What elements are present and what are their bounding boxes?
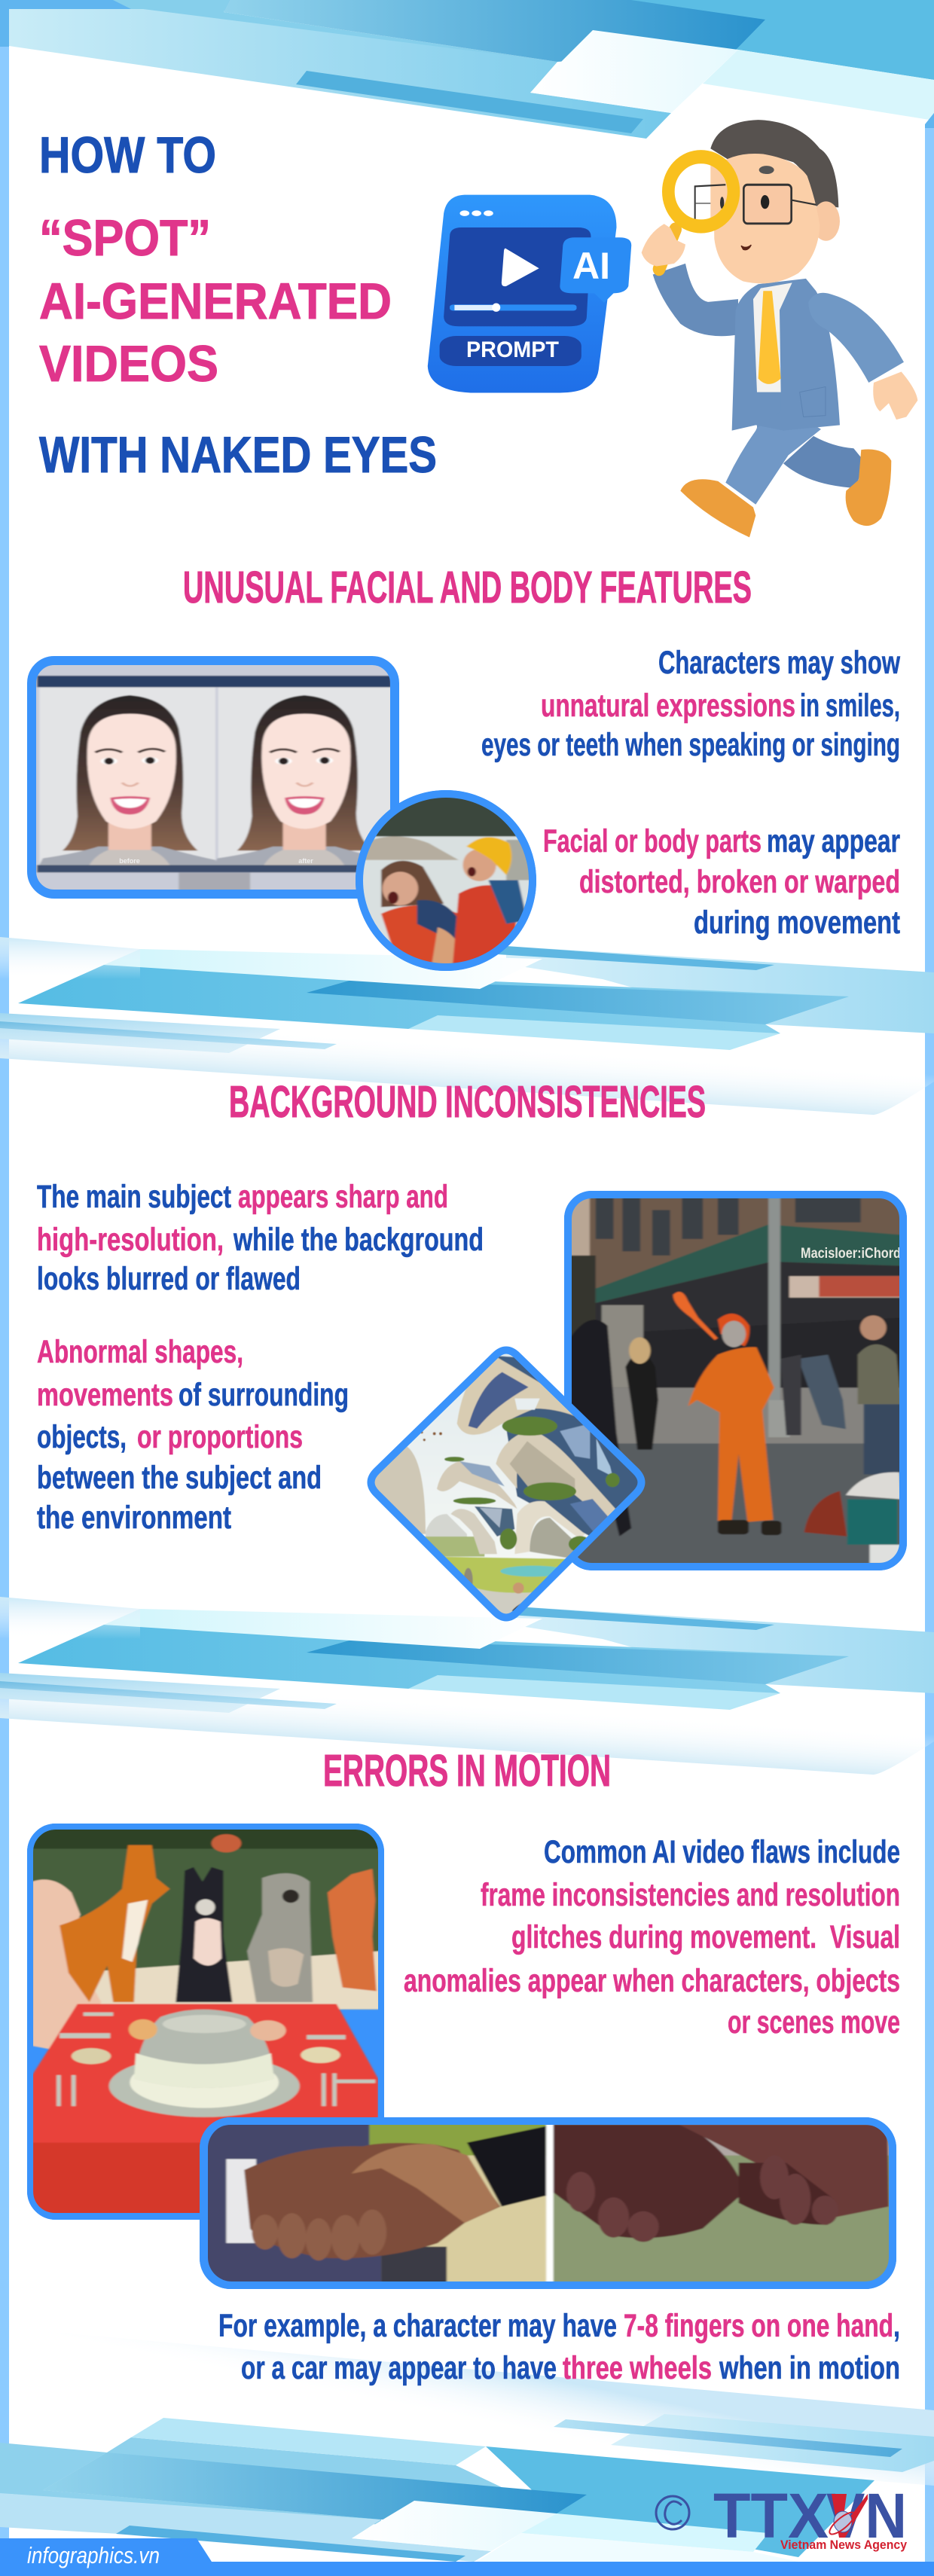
- text block: example: ,: [893, 2308, 900, 2344]
- text block: abnormal shapes: the environment: [37, 1500, 231, 1536]
- label: storefront sign: Macisloer:iChord: [801, 1246, 901, 1262]
- title: VIDEOS: [39, 335, 218, 392]
- title: AI-GENERATED: [39, 273, 392, 330]
- title: WITH NAKED EYES: [39, 426, 437, 484]
- image: dogs at red table: [30, 1827, 383, 2217]
- decorative footer fade: [0, 2329, 934, 2486]
- text block: example: [218, 2308, 900, 2386]
- illustration: man with magnifying glass: [642, 120, 917, 537]
- text block: distortion: [543, 823, 900, 941]
- decorative band after section 1: [0, 937, 934, 1115]
- decorative band after section 2: [0, 1597, 934, 1775]
- text block: example: For example, a character may have: [218, 2308, 617, 2344]
- title: HOW TO: [39, 127, 216, 184]
- wordmark: VN: [826, 2480, 907, 2551]
- icon: copyright mark: [656, 2496, 689, 2529]
- text block: expressions: unnatural expressions: [541, 688, 795, 724]
- image: street performer: [566, 1194, 905, 1567]
- footer tab: [0, 2538, 212, 2568]
- label: after: after: [298, 857, 313, 865]
- image: handshake comparison: [203, 2121, 893, 2285]
- text block: abnormal shapes: or proportions: [137, 1419, 303, 1455]
- text block: sharp subject: [37, 1179, 484, 1297]
- text block: sharp subject: The main subject: [37, 1179, 231, 1215]
- text block: distortion: Facial or body parts: [543, 823, 762, 859]
- text block: abnormal shapes: Abnormal shapes,: [37, 1334, 243, 1370]
- text block: sharp subject: appears sharp and: [238, 1179, 448, 1215]
- decorative header band: [0, 0, 934, 139]
- title: “SPOT”: [39, 209, 211, 267]
- tagline: Vietnam News Agency: [780, 2538, 907, 2552]
- title: [39, 127, 437, 484]
- footer bar: [0, 2562, 934, 2576]
- text block: expressions: [481, 645, 900, 763]
- text block: abnormal shapes: of surrounding: [179, 1377, 349, 1413]
- text block: abnormal shapes: movements: [37, 1377, 173, 1413]
- text block: sharp subject: while the background: [233, 1222, 484, 1258]
- website label: infographics.vn: [27, 2542, 160, 2568]
- image: futuristic building diamond: [368, 1347, 645, 1621]
- wordmark: TTX: [713, 2480, 829, 2551]
- copyright logo: TTXVN: [656, 2480, 907, 2552]
- text block: example: or a car may appear to have: [241, 2350, 557, 2386]
- text block: abnormal shapes: [37, 1334, 349, 1536]
- icon: AI video player card: [428, 195, 631, 392]
- icon: red V and globe: [826, 2494, 868, 2538]
- image: rafting circle: [352, 790, 542, 971]
- text block: abnormal shapes: between the subject and: [37, 1460, 322, 1496]
- text block: sharp subject: looks blurred or flawed: [37, 1261, 301, 1297]
- text block: common flaws: [404, 1834, 900, 2040]
- label: prompt button: PROMPT: [466, 337, 559, 362]
- label: AI badge: AI: [572, 245, 610, 287]
- label: before: before: [119, 857, 140, 865]
- wordmark: [713, 2480, 907, 2551]
- image: before and after faces: [24, 658, 405, 894]
- text block: example: three wheels: [563, 2350, 712, 2386]
- heading: errors in motion: ERRORS IN MOTION: [323, 1746, 611, 1796]
- text block: abnormal shapes: objects,: [37, 1419, 127, 1455]
- text block: sharp subject: high-resolution,: [37, 1222, 224, 1258]
- decorative footer band: [0, 2414, 934, 2562]
